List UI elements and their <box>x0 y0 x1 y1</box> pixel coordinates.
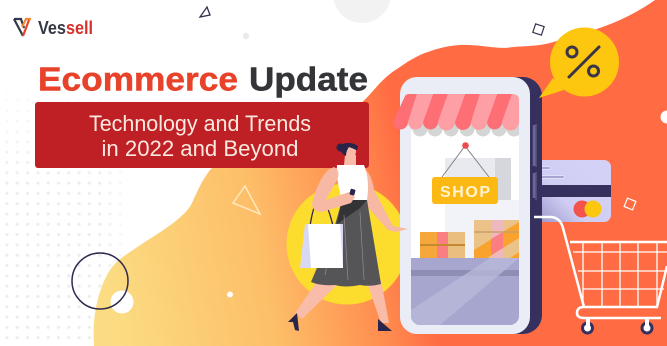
shopping bag <box>300 224 343 268</box>
yellow circle behind woman <box>286 184 408 304</box>
phone screen <box>411 124 519 325</box>
title word: Update: Update <box>249 62 368 98</box>
hair bun <box>336 144 344 152</box>
subtitle line 2: in 2022 and Beyond <box>102 136 298 161</box>
white circle <box>110 290 134 314</box>
sign pin <box>462 142 469 149</box>
hair <box>341 143 358 156</box>
bag handle <box>310 200 333 226</box>
small grey dot <box>243 33 249 39</box>
phone <box>393 77 542 334</box>
white triangle outline <box>233 186 260 214</box>
skirt fold lines <box>325 212 364 280</box>
credit card <box>520 160 611 222</box>
card stripe <box>530 185 611 197</box>
banner background <box>35 102 369 168</box>
cart wheels <box>582 319 652 333</box>
arm with phone <box>312 167 355 212</box>
dark ring <box>72 253 128 309</box>
awning light stripes <box>408 94 519 130</box>
phone front <box>400 77 530 334</box>
dark triangle outline <box>200 7 210 17</box>
top <box>337 165 368 200</box>
counter <box>411 258 519 325</box>
subtitle line 1: Technology and Trends <box>89 111 311 136</box>
logo <box>14 17 93 38</box>
cart rail <box>577 307 661 318</box>
box left <box>420 232 437 258</box>
woman <box>288 143 408 331</box>
bubble shape <box>539 78 564 98</box>
shopping cart <box>534 217 667 333</box>
phone dark back <box>440 77 542 334</box>
sign board <box>432 177 498 204</box>
face <box>344 144 356 158</box>
title word: Ecommerce: Ecommerce <box>38 62 238 98</box>
title <box>38 62 368 98</box>
dot pattern <box>6 130 120 339</box>
cart grid <box>573 242 667 307</box>
dark square outline <box>533 24 544 35</box>
awning dark stripes <box>393 94 512 130</box>
awning shadow <box>411 118 519 136</box>
sign text: SHOP <box>440 184 490 201</box>
sign strings <box>442 146 489 177</box>
white blob right edge <box>660 110 667 124</box>
light glare wall <box>445 200 519 260</box>
discount bubble <box>539 28 619 98</box>
legs <box>295 280 389 323</box>
white square outline <box>624 198 636 210</box>
shoes <box>288 313 392 331</box>
skirt shadow <box>337 200 367 224</box>
subtitle banner <box>35 102 369 168</box>
box right <box>474 220 519 260</box>
back arm <box>366 170 408 232</box>
card signature lines <box>538 168 563 177</box>
logo text: Vessell <box>38 17 93 38</box>
back shelf <box>445 158 495 177</box>
card logo <box>574 200 590 218</box>
hanging sign <box>432 142 498 204</box>
logo mark <box>14 19 31 36</box>
grey circle decoration <box>333 0 391 23</box>
neck <box>344 155 356 165</box>
phone side buttons <box>533 125 535 198</box>
cart basket <box>570 242 667 307</box>
awning <box>393 94 519 130</box>
cart handle and frame <box>534 217 584 307</box>
phone in hand <box>349 189 356 196</box>
card body <box>520 160 611 222</box>
skirt <box>311 200 381 286</box>
percent symbol <box>567 47 599 77</box>
white dot <box>227 292 233 298</box>
